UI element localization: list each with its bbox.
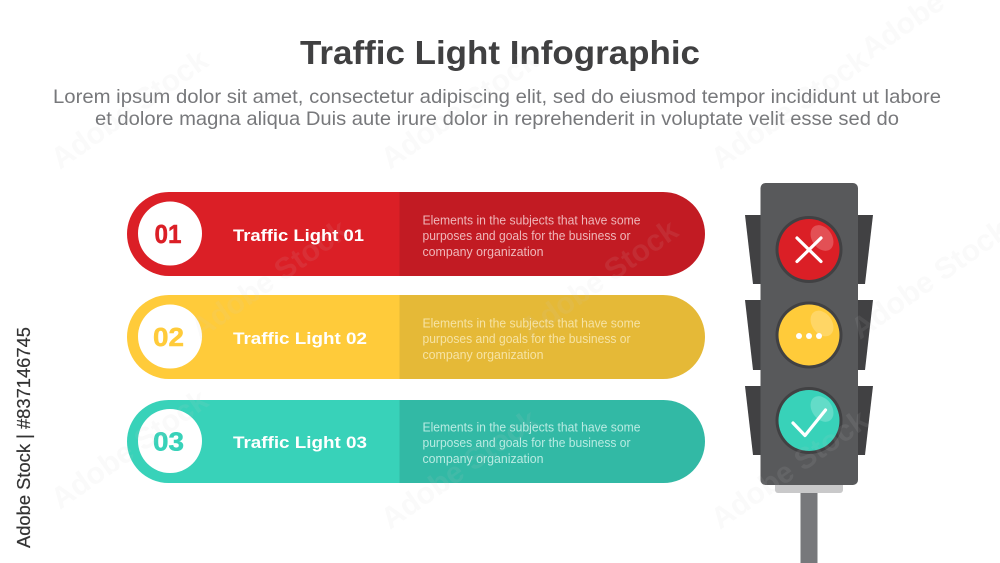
text: Adobe Stock — [515, 213, 684, 346]
description 02: Elements in the subjects that have some — [422, 316, 640, 330]
red light with cross — [776, 216, 842, 283]
description 02: purposes and goals for the business or — [422, 332, 630, 346]
description 01 — [422, 214, 640, 259]
subtitle text: et dolore magna aliqua Duis aute irure dolor in reprehenderit in voluptate velit esse sed do — [95, 108, 899, 130]
description 03: purposes and goals for the business or — [422, 436, 630, 450]
text: Adobe Stock — [375, 43, 544, 176]
side visors — [745, 215, 873, 455]
label 02: Traffic Light 02 — [233, 329, 367, 348]
label 01: Traffic Light 01 — [233, 226, 364, 245]
description 03: company organization — [422, 452, 544, 466]
description 01: Elements in the subjects that have some — [422, 214, 640, 228]
traffic light illustration — [745, 183, 873, 563]
text: Adobe Stock — [375, 403, 544, 536]
description 01: company organization — [422, 245, 544, 259]
number badge 02: 02 — [153, 322, 184, 352]
label 03: Traffic Light 03 — [233, 433, 367, 452]
panel: traffic light 02 — [127, 295, 706, 379]
number badge 02 — [138, 304, 202, 368]
subtitle text — [53, 86, 941, 130]
panel: traffic light 01 — [127, 192, 706, 276]
description 02 — [422, 316, 640, 362]
stock id text: Adobe Stock | #837146745 — [13, 327, 34, 548]
number badge 01: 01 — [154, 219, 182, 249]
number badge 01 — [138, 202, 202, 266]
text: Adobe Stock — [705, 43, 874, 176]
description 02: company organization — [422, 348, 544, 362]
text: Adobe Stock — [45, 43, 214, 176]
description 01: purposes and goals for the business or — [422, 229, 630, 243]
description 03: Elements in the subjects that have some — [422, 420, 640, 434]
text: Adobe Stock — [185, 213, 354, 346]
number badge 03 — [138, 409, 202, 473]
pole collar — [775, 484, 843, 493]
green light with check — [776, 387, 842, 454]
text: Adobe Stock — [45, 383, 214, 516]
description 03 — [422, 420, 640, 466]
panel: traffic light 03 — [127, 400, 706, 483]
housing — [760, 183, 858, 485]
number badge 03: 03 — [153, 426, 184, 456]
title: Traffic Light Infographic — [300, 34, 700, 71]
yellow light with dots — [776, 302, 842, 368]
pole — [800, 491, 818, 563]
text: Adobe Stock — [705, 403, 874, 536]
subtitle text: Lorem ipsum dolor sit amet, consectetur adipiscing elit, sed do eiusmod tempor incididunt ut labore — [53, 86, 941, 108]
